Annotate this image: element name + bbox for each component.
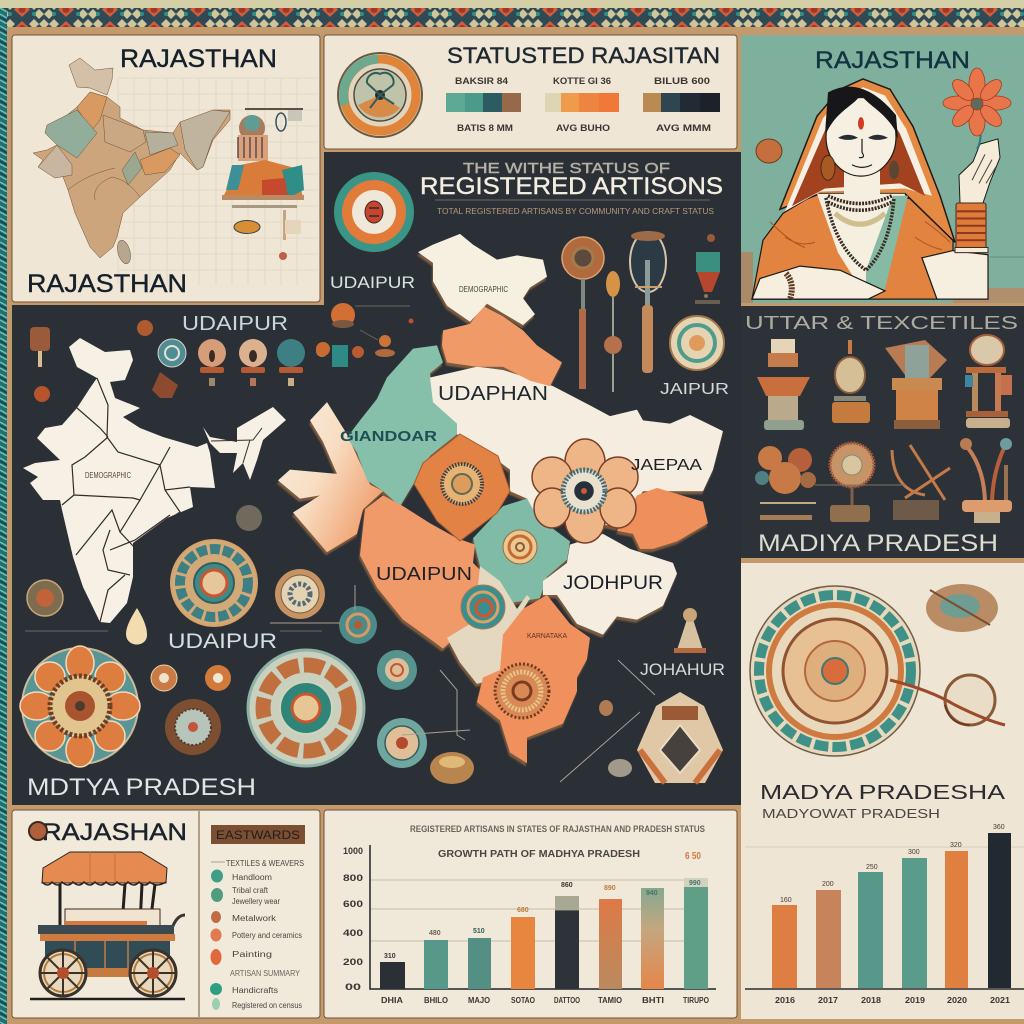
swatch group 2: [545, 76, 619, 133]
bar chart: right: 300: [908, 849, 920, 856]
panel title: status of registered artisons: TOTAL REGISTERED ARTISANS BY COMMUNITY AND CRAFT STATUS: [437, 207, 714, 216]
bar chart: right: 2019: [905, 996, 926, 1005]
medallion: teal disc: [377, 650, 417, 690]
map label: Jodhpur: JODHPUR: [563, 573, 663, 594]
medallion: orange lotus: [414, 434, 510, 541]
legend: [210, 825, 305, 1010]
bar chart: artisans: SOTAO: [511, 996, 535, 1005]
craft icons: top right tools: [562, 231, 724, 392]
swatch group 1: BATIS 8 MM: [457, 123, 513, 133]
map label: Jaepaa: JAEPAA: [631, 457, 702, 474]
icon: craft basket: [885, 340, 947, 429]
medallion: dotted disc: [165, 699, 221, 755]
icon: small charms: [599, 700, 632, 777]
legend: Painting: [232, 950, 272, 959]
icon: totem figure: [965, 335, 1012, 428]
swatch group 2: KOTTE GI 36: [553, 76, 611, 86]
illustration: carved object: [926, 584, 998, 632]
illustration: artisan cart: [30, 852, 185, 999]
medallion: teal swirl: [461, 585, 505, 629]
bar chart: artisans: 310: [384, 953, 396, 960]
heading: Rajasthan: RAJASTHAN: [120, 45, 277, 73]
map label: Kashmir small: DEMOGRAPHIC: [459, 285, 508, 294]
label: Udaipur left: UDAIPUR: [182, 313, 288, 335]
bar chart: artisans: 510: [473, 928, 485, 935]
bar chart: right: 320: [950, 842, 962, 849]
medallion: teal plate: [248, 650, 364, 766]
panel: central dark board: [12, 152, 741, 805]
ornamental left border: [0, 8, 7, 1024]
bar chart: artisans: DHIA: [381, 996, 403, 1005]
bar chart: right: 2018: [861, 996, 882, 1005]
medallion: centre disc: [503, 530, 537, 564]
icon: left wheel: [40, 950, 86, 996]
label: Jaipur: JAIPUR: [660, 381, 729, 398]
bar chart: artisans: 1000: [343, 846, 363, 856]
panel: Rajashan cart: [12, 810, 320, 1018]
illustration: ceramic plate: [750, 586, 920, 756]
panel: statusted Rajasthan: [324, 35, 737, 149]
bar chart: artisans: 680: [517, 907, 529, 914]
subheading: Madyowat Pradesh: MADYOWAT PRADESH: [762, 806, 940, 821]
icon: bell shrine: [674, 608, 706, 653]
medallion: dotted sun: [495, 664, 549, 718]
icon: pot: [430, 752, 474, 784]
bar chart: artisans: 200: [343, 957, 363, 967]
bar chart: right: 200: [822, 881, 834, 888]
bar chart: artisans: 400: [343, 928, 363, 938]
legend: Handicrafts: [232, 986, 278, 995]
bar chart: artisans: 00: [345, 982, 361, 992]
icon: flower: [943, 68, 1011, 136]
legend: Registered on census: [232, 1001, 302, 1010]
legend: Metalwork: [232, 914, 277, 923]
bar chart: artisans: TAMIO: [598, 996, 622, 1005]
legend: Jewellery wear: [232, 897, 280, 906]
medallion: status dial: [338, 53, 422, 137]
icon: seal on stand: [832, 340, 870, 423]
icon: temple figure: [637, 692, 723, 783]
medallion: title emblem: [334, 172, 414, 252]
icon: crossed tools: [815, 445, 950, 520]
legend: TEXTILES & WEAVERS: [226, 859, 304, 868]
heading: Madiya Pradesh dark: MADIYA PRADESH: [758, 530, 998, 557]
swatch group 2: AVG BUHO: [556, 123, 610, 133]
chart subtitle: GROWTH PATH OF MADHYA PRADESH: [438, 849, 640, 860]
heading: Rajashan: RAJASHAN: [42, 819, 187, 846]
icon: heading swirl: [29, 822, 47, 840]
ornamental top border: [7, 8, 1024, 27]
icon: small bud: [756, 139, 782, 163]
bar chart: artisans: DATTOO: [554, 996, 580, 1005]
medallion: twin beads: [151, 665, 231, 691]
legend: ARTISAN SUMMARY: [230, 969, 301, 978]
map: cream India left: DEMOGRAPHIC: [85, 471, 131, 480]
heading: Madya Pradesha: MADYA PRADESHA: [760, 782, 1006, 804]
chart callout: 6 50: [685, 851, 701, 862]
panel: Rajasthan woman portrait: [741, 35, 1024, 303]
map: coloured central India: [278, 234, 723, 763]
bar chart: artisans: 800: [343, 873, 363, 883]
icon: coiled disc: [830, 443, 874, 522]
icon: leaf cluster: [755, 446, 816, 520]
illustration: artisan at work: [222, 108, 304, 260]
swatch group 3: BILUB 600: [654, 76, 710, 86]
heading: statusted Rajasitan: STATUSTED RAJASITAN: [447, 43, 720, 68]
bar chart: artisans: 860: [561, 882, 573, 889]
legend: Pottery and ceramics: [232, 931, 302, 940]
swatch group 3: AVG MMM: [656, 123, 711, 133]
bar chart: artisans: BHTI: [642, 996, 664, 1005]
bar chart: artisans: 990: [689, 880, 701, 887]
legend: Tribal craft: [232, 886, 269, 895]
bar chart: right: 2016: [775, 996, 796, 1005]
chart title: REGISTERED ARTISANS IN STATES OF RAJASTHAN AND PRADESH STATUS: [410, 824, 705, 834]
medallion: patterned ring: [171, 540, 257, 626]
panel title: status of registered artisons: THE WITHE STATUS OF: [463, 160, 670, 177]
panel title: status of registered artisons: REGISTERED ARTISONS: [420, 173, 723, 200]
bar chart: right: [745, 824, 1024, 1005]
bar chart: right: 2017: [818, 996, 839, 1005]
icon: right wheel: [130, 950, 176, 996]
medallion: large orange flower: [20, 646, 140, 767]
bar chart: right: 360: [993, 824, 1005, 831]
bar chart: artisans: 600: [343, 899, 363, 909]
bar chart: artisans: 480: [429, 930, 441, 937]
heading: Rajasthan portrait: RAJASTHAN: [815, 47, 970, 74]
panel: Rajasthan map: [12, 35, 320, 302]
medallion: teal small: [339, 606, 377, 644]
bar chart: artisans: 940: [646, 890, 658, 897]
map: cream India left: [23, 338, 286, 644]
bar chart: artisans: BHILO: [424, 996, 448, 1005]
label: Udaipur lower: UDAIPUR: [168, 630, 277, 653]
panel: Uttar textiles: [741, 306, 1024, 558]
bar chart: artisans: 890: [604, 885, 616, 892]
label: Johaur: JOHAHUR: [640, 660, 725, 679]
heading: Uttar textiles: UTTAR & TEXCETILES: [745, 313, 1018, 333]
map label: Udaipun: UDAIPUN: [376, 564, 472, 584]
bar chart: artisans: TIRUPO: [683, 996, 709, 1005]
bar chart: right: 2020: [947, 996, 968, 1005]
label: Udaipur upper: UDAIPUR: [330, 273, 415, 292]
medallion: script seal: [275, 569, 325, 619]
swatch group 1: BAKSIR 84: [455, 76, 508, 86]
connector lines: [270, 585, 655, 782]
map: tan India: [33, 58, 230, 265]
illustration: woman with flower: [752, 79, 1000, 299]
map label: Udaphan: UDAPHAN: [438, 383, 548, 405]
legend: EASTWARDS: [216, 828, 300, 842]
map label: Gianpoar: GIANDOAR: [340, 428, 437, 445]
swatch group 1: [446, 76, 521, 133]
medallion: lower teal bowl: [377, 718, 427, 768]
top beige strip: [0, 0, 1024, 8]
label: Mdtya Pradesh: MDTYA PRADESH: [27, 774, 256, 801]
panel title: status of registered artisons: [420, 160, 723, 216]
bar chart: right: 250: [866, 864, 878, 871]
bar chart: artisans: [343, 845, 716, 1005]
icon: branching stand: [960, 438, 1012, 523]
bar chart: artisans: MAJO: [468, 996, 490, 1005]
panel: bar chart centre: [324, 810, 737, 1018]
craft icons row: [27, 303, 414, 616]
medallion: petal flower: [532, 439, 638, 543]
icon: drum pillar: [757, 339, 810, 430]
legend: Handloom: [232, 873, 272, 882]
label: Rajasthan lower: RAJASTHAN: [27, 270, 187, 298]
panel: plate and bar chart right: [741, 563, 1024, 1019]
swatch group 3: [643, 76, 720, 133]
illustration: bowl and cord: [890, 675, 1005, 725]
bar chart: right: 2021: [990, 996, 1011, 1005]
map label: south small: KARNATAKA: [527, 633, 567, 640]
bar chart: right: 160: [780, 897, 792, 904]
